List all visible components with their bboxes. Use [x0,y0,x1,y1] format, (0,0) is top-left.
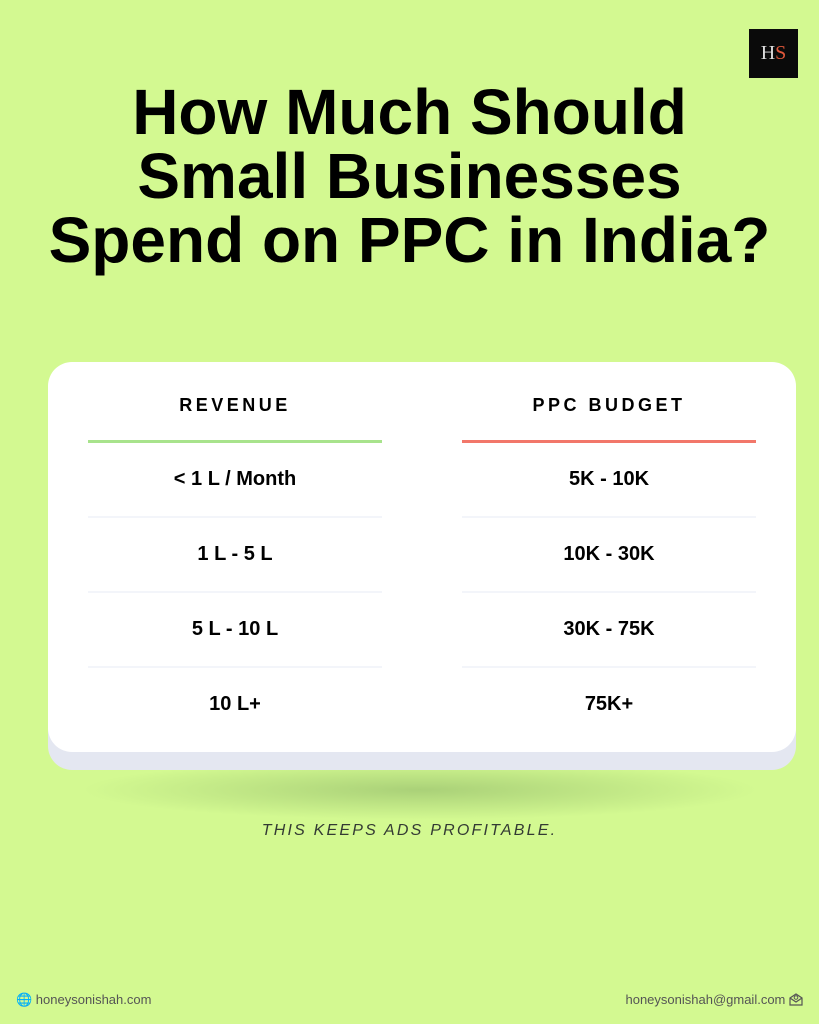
column: ppc budget [462,395,756,715]
title: Spend on PPC in India? [49,204,770,276]
footer: website: 🌐 honeysonishah.com [16,992,151,1007]
title [49,76,770,276]
column: revenue [88,395,382,715]
note text: THIS KEEPS ADS PROFITABLE. [262,822,557,839]
card shadow [80,760,760,820]
column: ppc budget: 30K - 75K [563,618,655,640]
panel: table [48,362,796,752]
column: ppc budget: 10K - 30K [563,543,655,565]
footer: email: honeysonishah@gmail.com [625,992,785,1007]
column: revenue: 1 L - 5 L [197,543,273,565]
title: How Much Should [132,76,687,148]
header: revenue: REVENUE [179,395,291,415]
header: ppc budget: PPC BUDGET [532,395,686,415]
column: revenue: < 1 L / Month [174,468,296,490]
column: ppc budget: 75K+ [585,693,633,715]
logo [749,29,798,78]
column: revenue: 10 L+ [209,693,261,715]
column: ppc budget: 5K - 10K [569,468,649,490]
column: revenue: 5 L - 10 L [192,618,278,640]
logo: HS [761,42,786,64]
title: Small Businesses [137,140,682,212]
card base layer [48,380,796,770]
